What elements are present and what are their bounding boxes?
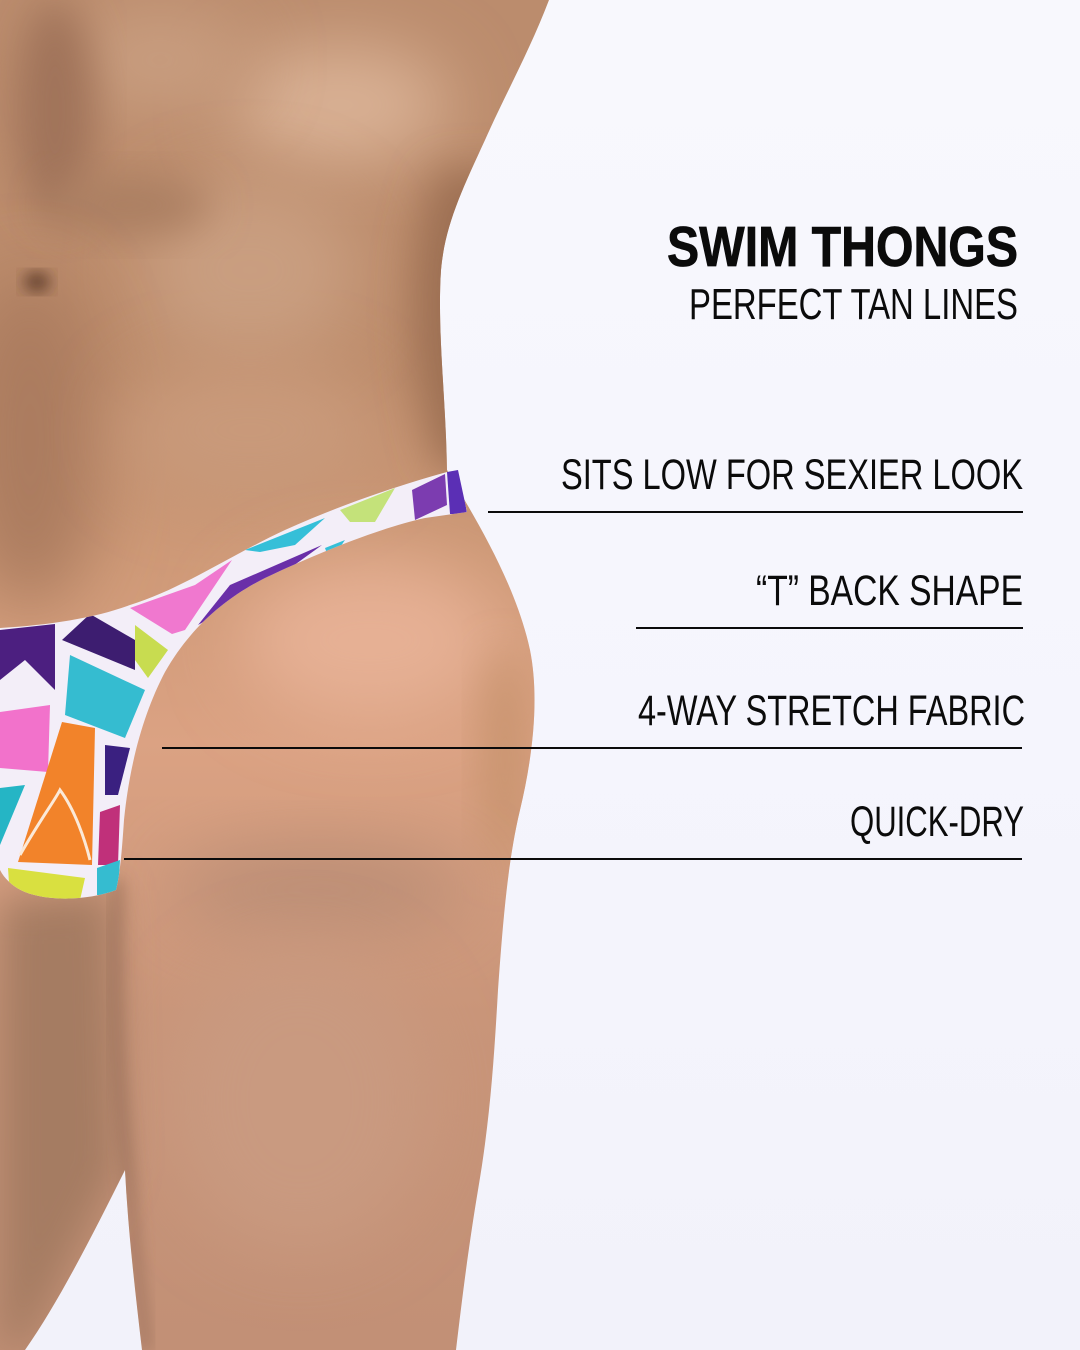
swimwear: printed thong <box>0 460 480 910</box>
figure: torso and legs <box>0 0 560 1350</box>
navel <box>24 273 50 291</box>
title: SWIM THONGS <box>667 215 1018 279</box>
